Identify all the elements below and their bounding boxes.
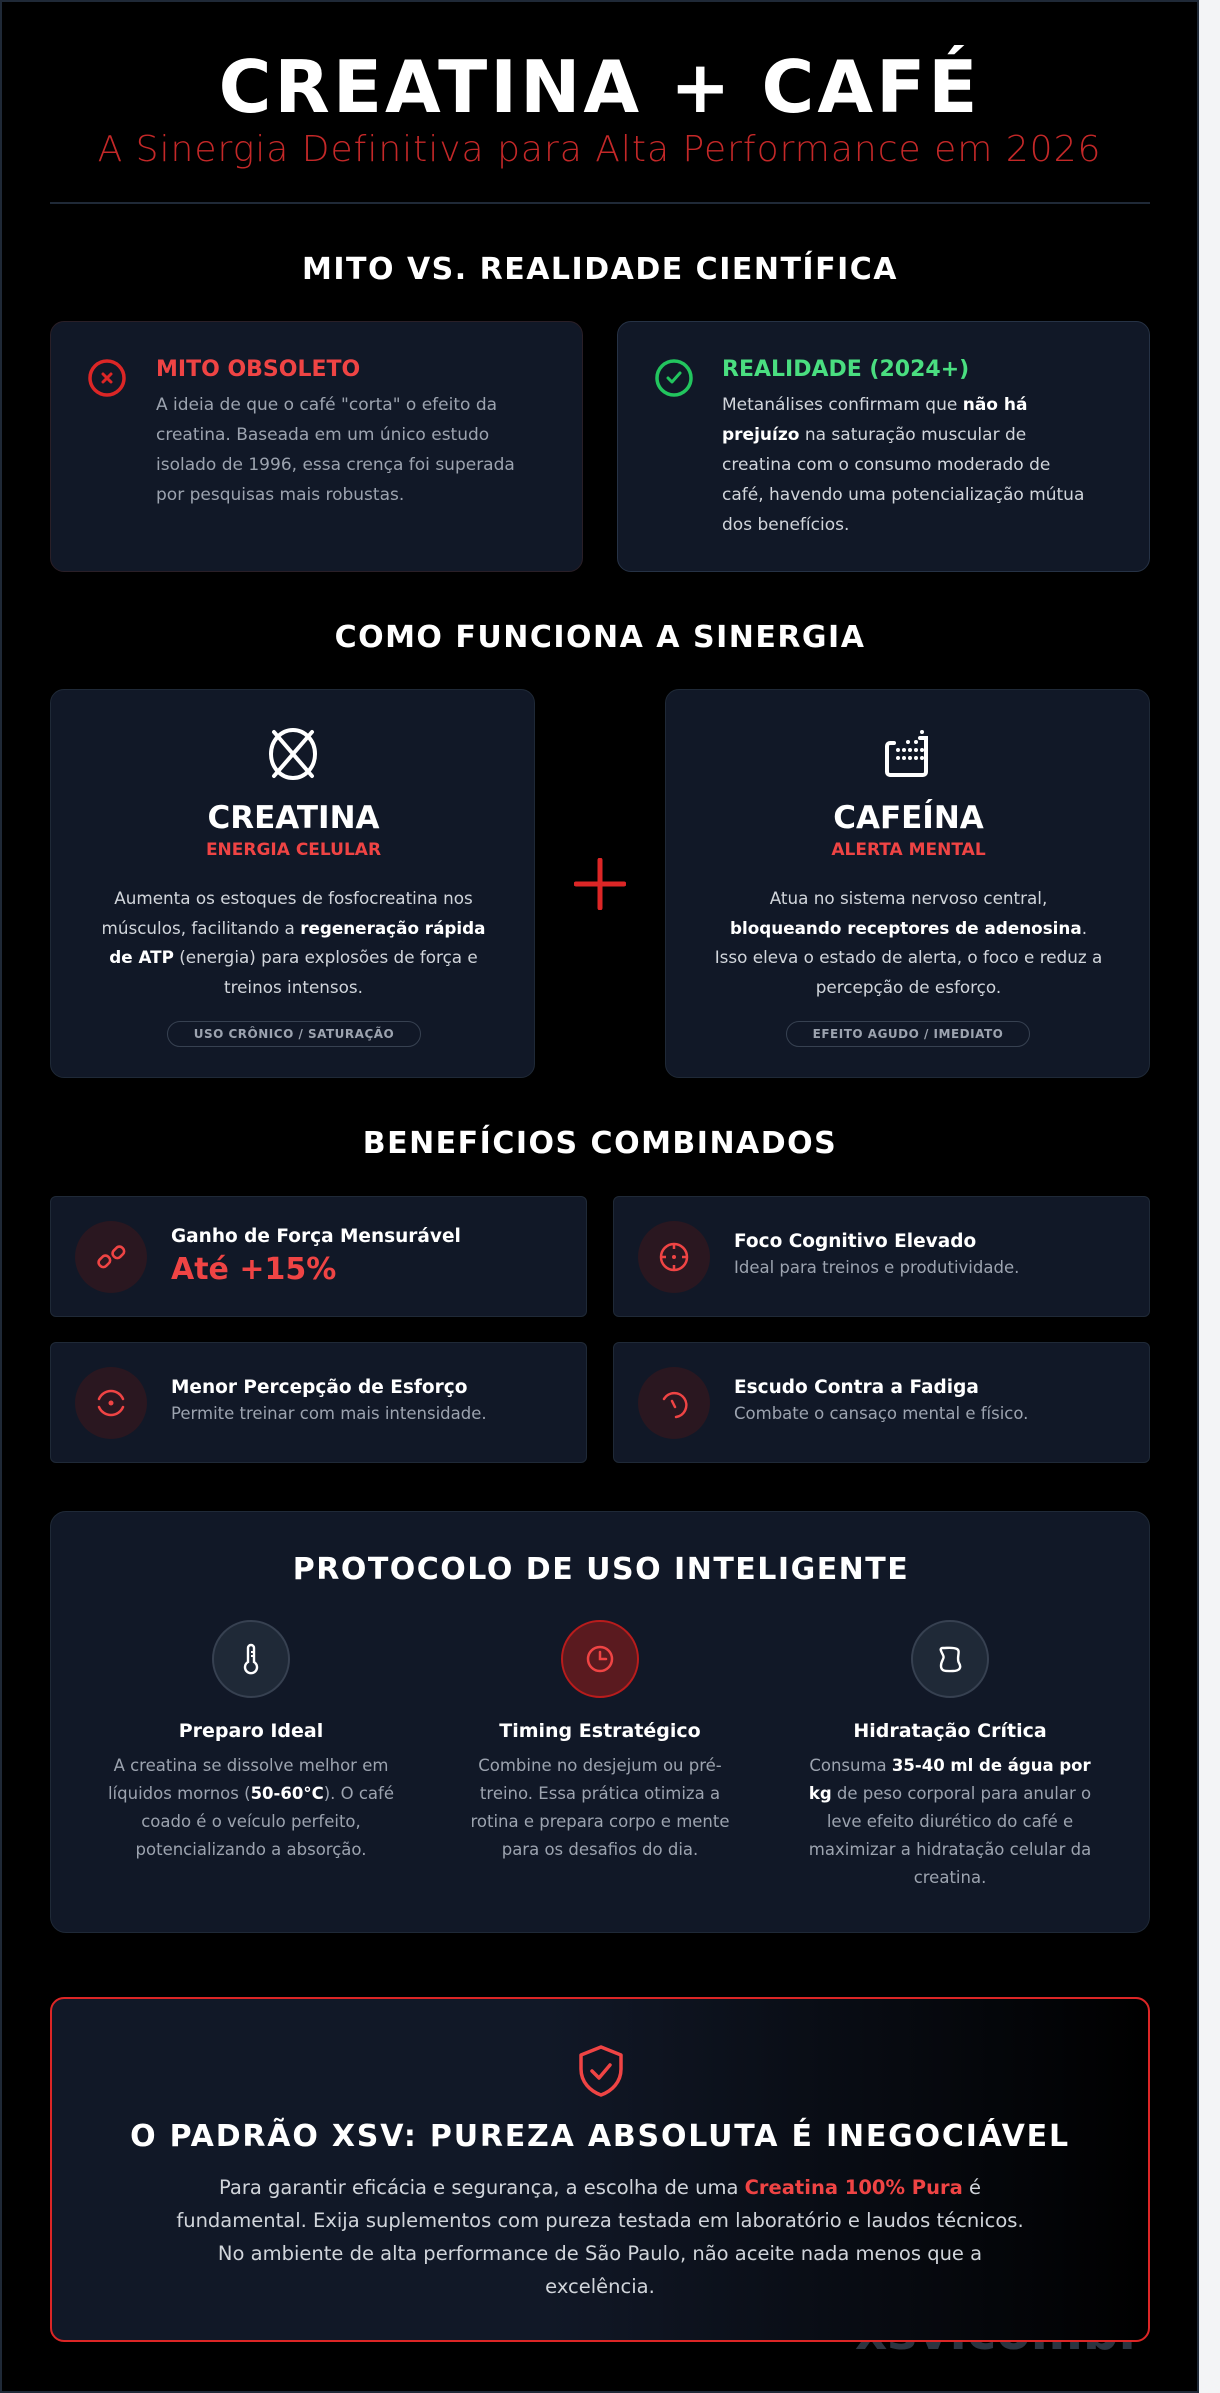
benefit: esforco: Permite treinar com mais intensidade. (171, 1404, 487, 1423)
panel: realidade (617, 321, 1150, 572)
step: hidratacao: kg de peso corporal para anular o leve efeito diurético do café e maximizar a hidratação celular da creatina. (809, 1784, 1091, 1887)
benefit: esforco (50, 1342, 587, 1463)
realidade text: creatina com o consumo moderado de (722, 455, 1050, 475)
step: timing: Timing Estratégico (499, 1720, 701, 1742)
cafeina text: Isso eleva o estado de alerta, o foco e reduz a percepção de esforço. (715, 947, 1102, 996)
subtitle: A Sinergia Definitiva para Alta Performance em 2026 (98, 129, 1101, 170)
benefit: foco: Foco Cognitivo Elevado (734, 1231, 976, 1252)
step: hidratacao: Hidratação Crítica (853, 1720, 1047, 1742)
icon: water (911, 1620, 989, 1698)
panel: creatina (50, 689, 535, 1078)
heading: mito vs realidade: MITO VS. REALIDADE CIENTÍFICA (302, 252, 898, 287)
creatina text: de ATP (energia) para explosões de força e treinos intensos. (109, 947, 478, 996)
icon: check circle (655, 359, 693, 397)
cafeina text: bloqueando receptores de adenosina. (730, 918, 1087, 938)
cafeina text: ALERTA MENTAL (831, 840, 986, 860)
body text: excelência. (545, 2275, 655, 2298)
panel: protocolo (50, 1511, 1150, 1933)
icon: creatina (269, 728, 317, 780)
benefit: forca: Ganho de Força Mensurável (171, 1226, 461, 1247)
pill: uso crônico: USO CRÔNICO / SATURAÇÃO (194, 1027, 394, 1041)
step: preparo (108, 1620, 394, 1859)
creatina text: ENERGIA CELULAR (206, 840, 381, 860)
icon: shield (579, 2045, 623, 2097)
mito text: A ideia de que o café "corta" o efeito da creatina. Baseada em um único estudo isolado de 1996, essa crença foi superada por pesquisas mais robustas. (156, 395, 515, 505)
realidade text: Metanálises confirmam que não há (722, 395, 1027, 415)
body text: Para garantir eficácia e segurança, a escolha de uma Creatina 100% Pura é (219, 2176, 981, 2199)
pill: efeito agudo: EFEITO AGUDO / IMEDIATO (813, 1027, 1003, 1041)
pill: efeito agudo (786, 1021, 1030, 1047)
realidade text: café, havendo uma potencialização mútua (722, 485, 1084, 505)
creatina text (101, 800, 486, 996)
cafeina text: Atua no sistema nervoso central, (770, 888, 1047, 908)
creatina text: Aumenta os estoques de fosfocreatina nos músculos, facilitando a regeneração rápida (101, 888, 486, 938)
body text: No ambiente de alta performance de São Paulo, não aceite nada menos que a (218, 2242, 982, 2265)
icon: gauge (75, 1367, 147, 1439)
icon: shield gauge (638, 1367, 710, 1439)
realidade text: prejuízo na saturação muscular de (722, 425, 1026, 445)
panel: mito (50, 321, 583, 572)
icon: target (638, 1221, 710, 1293)
icon: clock (561, 1620, 639, 1698)
step: timing: Combine no desjejum ou pré-treino. Essa prática otimiza a rotina e prepara corpo e mente para os desafios do dia. (470, 1756, 730, 1859)
icon: thermometer (212, 1620, 290, 1698)
icon: plus (574, 858, 626, 910)
cafeina text: CAFEÍNA (833, 800, 984, 836)
panel: padrao xsv (50, 1997, 1150, 2342)
benefit: fadiga (613, 1342, 1150, 1463)
step: hidratacao: Consuma 35-40 ml de água por (809, 1756, 1091, 1775)
realidade text: dos benefícios. (722, 515, 849, 535)
step: preparo: Preparo Ideal (179, 1720, 323, 1742)
body text: fundamental. Exija suplementos com pureza testada em laboratório e laudos técnicos. (176, 2209, 1024, 2232)
step: hidratacao (809, 1620, 1091, 1887)
title: CREATINA + CAFÉ (219, 45, 980, 129)
benefit: forca: Até +15% (171, 1252, 336, 1287)
heading: protocolo: PROTOCOLO DE USO INTELIGENTE (293, 1552, 909, 1587)
cafeina text (715, 799, 1102, 996)
panel: cafeina (665, 689, 1150, 1078)
benefit: foco: Ideal para treinos e produtividade. (734, 1258, 1019, 1277)
mito text: MITO OBSOLETO (156, 357, 360, 382)
step: preparo: A creatina se dissolve melhor em líquidos mornos (50-60°C). O café coado é o veículo perfeito, potencializando a absorção. (108, 1756, 394, 1859)
icon: x circle (88, 359, 126, 397)
heading: padrao: O PADRÃO XSV: PUREZA ABSOLUTA É INEGOCIÁVEL (130, 2119, 1070, 2154)
benefit: fadiga: Escudo Contra a Fadiga (734, 1377, 979, 1398)
realidade text: REALIDADE (2024+) (722, 357, 969, 382)
heading: beneficios: BENEFÍCIOS COMBINADOS (363, 1126, 837, 1161)
icon: link (75, 1221, 147, 1293)
step: timing (470, 1620, 730, 1859)
realidade text (722, 357, 1084, 535)
benefit: foco (613, 1196, 1150, 1317)
benefit: esforco: Menor Percepção de Esforço (171, 1377, 467, 1398)
icon: cafeina (885, 730, 928, 777)
pill: uso crônico (167, 1021, 421, 1047)
watermark: xsvicombr (855, 2303, 1143, 2361)
creatina text: CREATINA (208, 800, 380, 836)
benefit: forca (50, 1196, 587, 1317)
benefit: fadiga: Combate o cansaço mental e físico. (734, 1404, 1028, 1423)
body text (176, 2176, 1024, 2298)
heading: sinergia: COMO FUNCIONA A SINERGIA (335, 620, 865, 655)
